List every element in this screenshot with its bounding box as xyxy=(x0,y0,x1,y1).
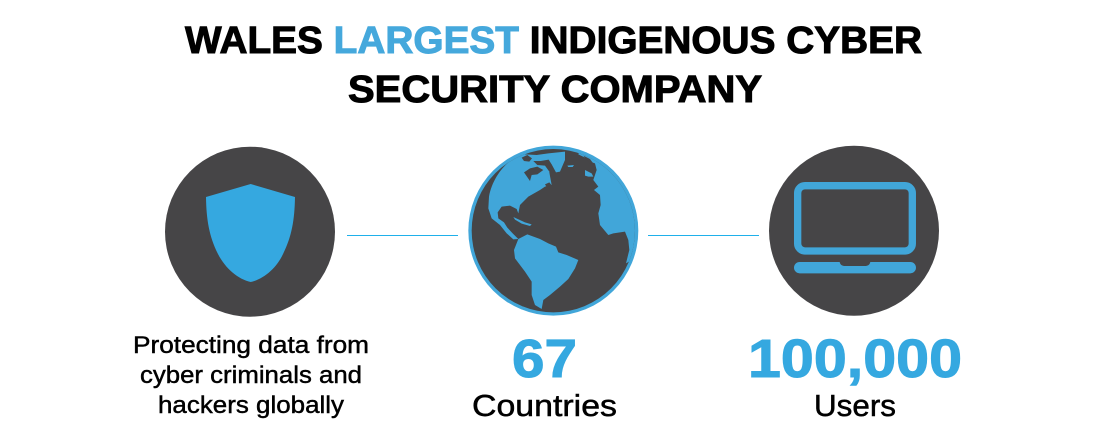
panel: countries xyxy=(468,146,638,416)
connector: globe to laptop xyxy=(648,235,759,236)
text: protection caption: cyber criminals and xyxy=(140,362,362,389)
icon: shield in circle xyxy=(165,147,335,317)
title xyxy=(185,20,922,111)
title: SECURITY COMPANY xyxy=(348,69,762,111)
label: Countries: Countries xyxy=(472,388,617,423)
text: protection caption: hackers globally xyxy=(158,392,344,419)
stat: 100,000: 100,000 xyxy=(748,329,962,389)
text: protection caption: Protecting data from xyxy=(133,332,369,359)
label: Users: Users xyxy=(814,388,896,423)
stat: 67: 67 xyxy=(512,329,577,389)
connector: shield to globe xyxy=(347,235,458,236)
icon: globe xyxy=(468,146,638,316)
title: WALES LARGEST INDIGENOUS CYBER xyxy=(185,20,922,62)
panel: users xyxy=(748,146,962,423)
panel: protection xyxy=(133,147,369,419)
text: protection caption xyxy=(133,332,369,419)
icon: laptop in circle xyxy=(769,146,939,316)
